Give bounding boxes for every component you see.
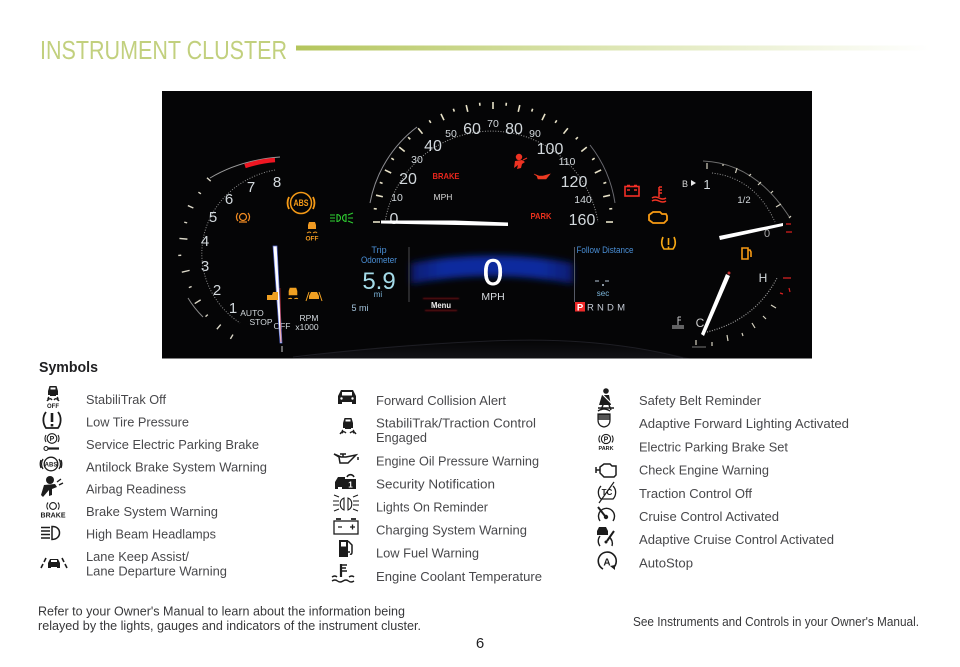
label: AutoStop: AutoStop: [639, 556, 693, 570]
icon: autostop: [598, 552, 616, 570]
icon: ABS: ABS: [45, 462, 57, 468]
speedometer labels: PARK: [530, 211, 552, 221]
gauge: tachometer: 5: [209, 209, 217, 226]
label: Security Notification: Security Notification: [376, 476, 495, 492]
label: Engine Oil Pressure Warning: Engine Oil Pressure Warning: [376, 454, 539, 468]
icon: StabiliTrak off: OFF: [47, 404, 59, 410]
label: Engaged: Engaged: [376, 430, 427, 445]
display: center info: Follow Distance: [576, 245, 634, 255]
display: center info: 5 mi: [351, 303, 369, 313]
icon: safety belt: [598, 388, 614, 410]
warning: check engine: [649, 212, 667, 223]
label: Cruise Control Activated: Cruise Control Activated: [639, 509, 779, 524]
speedometer labels: [432, 171, 552, 221]
display: center info: sec: [597, 289, 609, 298]
icon: lane keep: [41, 558, 67, 568]
warning: battery red: [625, 186, 639, 196]
warnings: lane, stability, airbag: [267, 288, 322, 301]
gauge: fuel: 1: [703, 177, 711, 192]
icon: battery: [334, 519, 358, 534]
label: Lane Keep Assist: Lane Keep Assist/: [86, 549, 189, 564]
label: Low Tire Pressure: Low Tire Pressure: [86, 414, 189, 430]
label: StabiliTrak/Traction Control: StabiliTrak/Traction Control: [376, 416, 536, 430]
icon: security: [335, 475, 356, 490]
icon: adaptive cruise: [597, 527, 614, 546]
gauge: speedometer: 160: [569, 212, 595, 229]
icon: high beam: [41, 526, 60, 540]
label: High Beam Headlamps: High Beam Headlamps: [86, 526, 216, 542]
display: center info: [351, 245, 634, 314]
gauge: speedometer: 80: [505, 121, 523, 138]
display: center info: MPH: [481, 291, 505, 303]
icon: adaptive forward lighting: [598, 409, 610, 427]
gauge: tachometer: 1: [229, 300, 237, 317]
speedometer needle: [381, 220, 508, 226]
icon: traction off: TC: [602, 488, 613, 497]
gauge: tachometer: 4: [201, 233, 209, 250]
display: center info: 0: [483, 252, 503, 293]
gauge: speedometer: 70: [487, 118, 499, 130]
gauge: temperature: C: [696, 316, 705, 330]
icon: cruise control: [598, 507, 614, 521]
title rule: [296, 46, 930, 50]
temperature needle: [701, 274, 730, 336]
icon: StabiliTrak off: [47, 386, 59, 410]
label: Adaptive Cruise Control Activated: Adaptive Cruise Control Activated: [639, 532, 834, 547]
gauge: fuel: B: [682, 179, 688, 189]
gauge: tachometer: [178, 157, 353, 352]
icon: airbag: [41, 476, 63, 497]
gauge: speedometer: 120: [561, 174, 587, 191]
label: Service Electric Parking Brake: Service Electric Parking Brake: [86, 437, 259, 452]
label: Traction Control Off: Traction Control Off: [639, 486, 752, 501]
icon: service parking brake: [44, 434, 59, 450]
label: Lane Departure Warning: Lane Departure Warning: [86, 564, 227, 578]
gauge: temperature: [672, 271, 791, 347]
icon: lights on: [333, 495, 359, 511]
icon: traction off: [598, 482, 616, 503]
warning: headlight green: [330, 213, 353, 223]
label: Adaptive Forward Lighting Activated: Adaptive Forward Lighting Activated: [639, 416, 849, 431]
warning: ABS: ABS: [294, 198, 308, 208]
legend column 1: [40, 386, 267, 578]
legend column 2: [332, 390, 542, 584]
icon: oil pressure: [334, 454, 358, 463]
warning: fuel orange: [742, 248, 751, 259]
label: Engine Coolant Temperature: Engine Coolant Temperature: [376, 569, 542, 584]
icon: parking brake set: P: [604, 436, 609, 444]
gauge: speedometer: 90: [529, 128, 541, 140]
gauge: speedometer: 140: [574, 194, 592, 206]
icon: ABS: [40, 457, 62, 471]
gauge: speedometer: 110: [559, 156, 576, 168]
gauge: speedometer: 50: [445, 128, 457, 140]
display: center info: 5.9: [362, 268, 396, 295]
page number: 6: [476, 635, 484, 652]
gauge: speedometer: [370, 102, 615, 229]
label: Forward Collision Alert: Forward Collision Alert: [376, 393, 506, 408]
icon: StabiliTrak traction: [340, 418, 356, 434]
gauge: fuel: 1/2: [737, 195, 751, 206]
gauge: fuel: 0: [764, 228, 770, 240]
label: StabiliTrak Off: StabiliTrak Off: [86, 392, 166, 407]
icon: autostop: A: [603, 558, 611, 568]
label: Antilock Brake System Warning: Antilock Brake System Warning: [86, 460, 267, 474]
label: Electric Parking Brake Set: Electric Parking Brake Set: [639, 440, 788, 454]
gauge: tachometer: 6: [225, 191, 233, 208]
label: Charging System Warning: Charging System Warning: [376, 522, 527, 538]
gauge: speedometer: 10: [391, 192, 403, 204]
icon: parking brake set: [598, 434, 614, 452]
gauge: speedometer: 20: [399, 171, 417, 188]
heading: symbols: Symbols: [39, 359, 98, 376]
gauge: tachometer: 2: [213, 282, 221, 299]
footnote: right: See Instruments and Controls in your Owner's Manual.: [633, 615, 919, 629]
warning: StabiliTrak off: OFF: [306, 236, 319, 242]
icon: fuel: [339, 540, 352, 557]
warning: airbag red: [514, 154, 527, 169]
icon: low tire: [43, 412, 61, 428]
gauge: tachometer: 8: [273, 174, 281, 191]
speedometer labels: MPH: [434, 192, 452, 202]
icon: brake: BRAKE: [41, 512, 66, 520]
tach needle: [273, 246, 282, 352]
gauge: fuel: [682, 161, 792, 240]
warning: StabiliTrak off: [306, 222, 319, 242]
speedometer labels: BRAKE: [432, 171, 460, 181]
footnote: left: [38, 604, 421, 633]
title: INSTRUMENT CLUSTER: [40, 35, 287, 65]
coolant icon grey: [672, 317, 684, 328]
gauge: tachometer: 7: [247, 179, 255, 196]
display: center info: mi: [374, 290, 382, 299]
footnote: left: Refer to your Owner's Manual to learn about the information being: [38, 604, 405, 618]
gauge: speedometer: 0: [390, 211, 399, 228]
label: Low Fuel Warning: Low Fuel Warning: [376, 546, 479, 560]
icon: brake: [40, 502, 66, 520]
label: Lights On Reminder: Lights On Reminder: [376, 500, 489, 514]
gauge: speedometer: 100: [537, 141, 563, 158]
warning: TPMS: [662, 237, 675, 249]
icon: service parking brake: P: [50, 436, 55, 443]
label: Airbag Readiness: Airbag Readiness: [86, 482, 186, 496]
display: center info: Trip: [371, 245, 387, 255]
footnote: left: relayed by the lights, gauges and indicators of the instrument cluster.: [38, 619, 421, 633]
icon: parking brake set: PARK: [598, 446, 614, 452]
warning: service brake: [236, 213, 250, 222]
warning cluster right: [625, 186, 751, 259]
gauge: tachometer: RPM: [300, 313, 318, 323]
gauge: speedometer: 60: [463, 121, 481, 138]
panel: instrument cluster photo: [162, 91, 812, 358]
display: center info: RNDM: [587, 302, 625, 314]
gauge: tachometer: OFF: [274, 321, 290, 331]
icon: forward collision: [338, 390, 356, 404]
gauge: tachometer: 3: [201, 258, 209, 275]
label: Safety Belt Reminder: Safety Belt Reminder: [639, 393, 762, 408]
gauge: tachometer: x1000: [295, 322, 319, 332]
display: center info: Odometer: [361, 255, 397, 265]
fuel needle: [719, 223, 783, 240]
display: center info: Menu: [431, 300, 451, 310]
gauge: speedometer: 30: [411, 154, 423, 166]
gauge: temperature: H: [759, 271, 767, 285]
warning: ABS: [288, 192, 314, 214]
gauge: tachometer: STOP: [250, 317, 273, 327]
warning: coolant red: [652, 187, 666, 202]
icon: coolant: [332, 564, 354, 582]
display: center info: P: [577, 302, 584, 314]
label: Check Engine Warning: Check Engine Warning: [639, 462, 769, 478]
label: Brake System Warning: Brake System Warning: [86, 504, 218, 519]
legend column 3: [596, 388, 849, 570]
gauge: speedometer: 40: [424, 138, 442, 155]
icon: check engine: [596, 464, 616, 477]
warning: oil red: [534, 174, 550, 179]
icon: security: 1: [348, 480, 353, 490]
gauge: tachometer: AUTO: [240, 308, 264, 318]
